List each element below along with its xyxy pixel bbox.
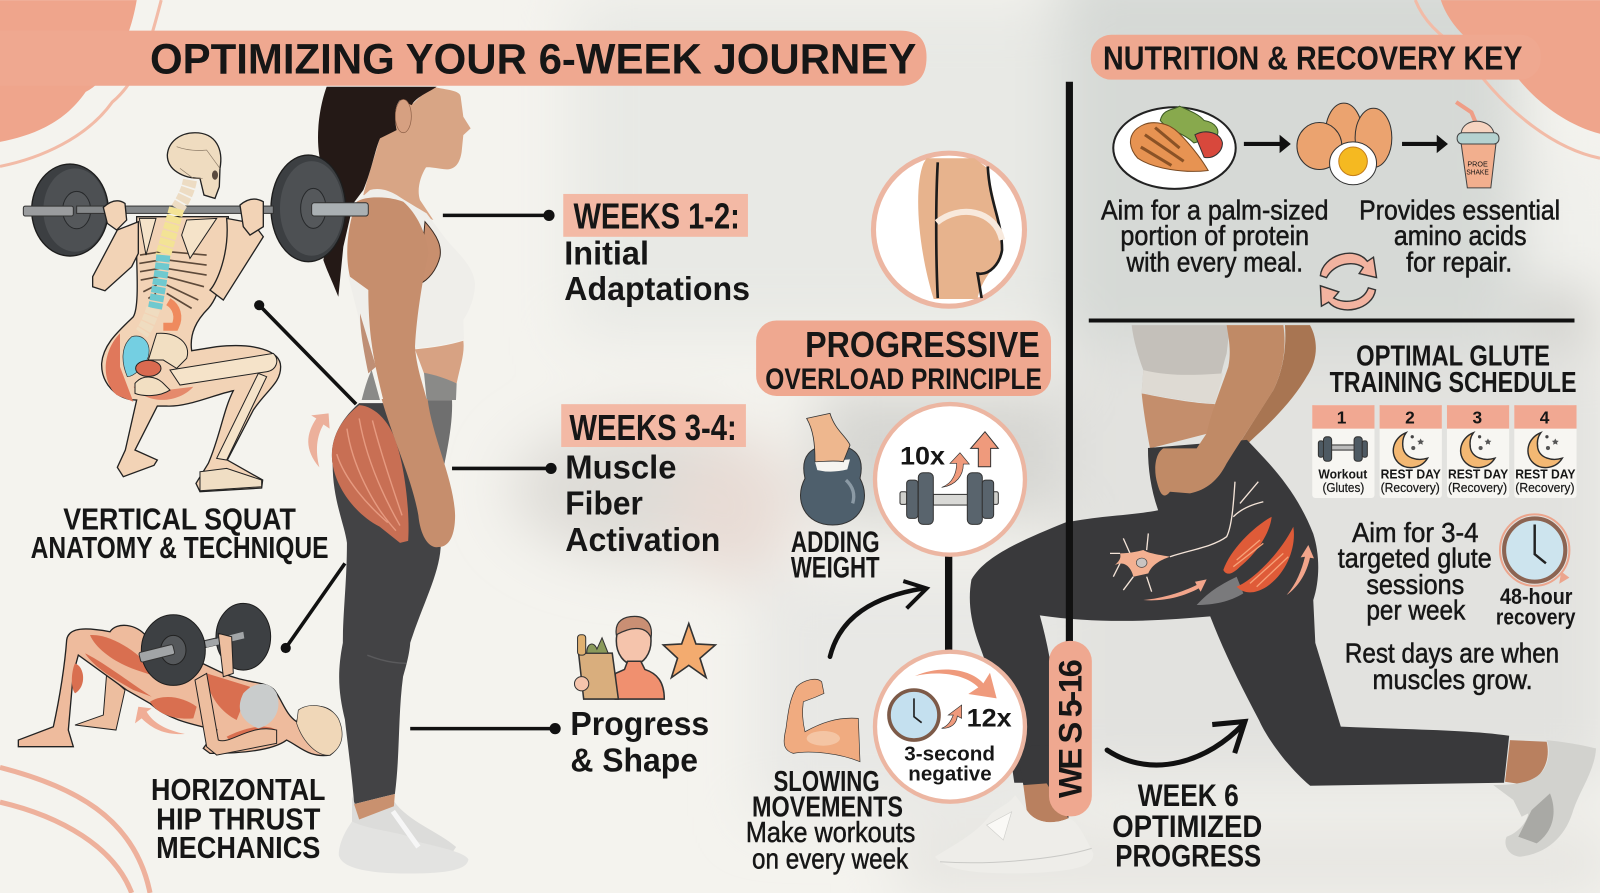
callout: weeks 1-2: WEEKS 1-2: [573,197,740,237]
back skin [360,313,376,373]
icon: recovery cycle arrows [1320,253,1377,310]
neck vertebrae [177,180,190,210]
hip thrust illustration [18,603,342,756]
nutrition heading: NUTRITION & RECOVERY KEY [1103,40,1522,77]
schedule heading [1330,340,1577,399]
label: slowing movements [746,766,915,875]
arrow: upward [971,432,998,467]
callout: progress and shape: Progress [570,706,709,743]
label: adding weight: ADDING [791,526,880,559]
icon: eggs [1297,103,1392,185]
label: vertical squat [31,503,329,565]
decorative corner: bottom left arcs [0,767,150,893]
arms [93,199,263,300]
text: sessions per week: Aim for 3-4 [1352,517,1479,548]
day 1: 1 [1337,408,1347,428]
face and neck [363,87,471,220]
label: 48-hour recovery [1496,584,1576,630]
barbell [139,603,271,685]
underarm skin [419,222,440,284]
colored spine [142,208,177,333]
label: slowing movements: SLOWING [773,766,880,798]
waistband [362,370,457,400]
arrow: protein to eggs [1244,135,1291,153]
text: palm sized protein [1101,194,1329,277]
text: rest days: muscles grow. [1372,664,1533,695]
bare abdomen [1142,393,1215,448]
callout: weeks 1-2: Initial [564,235,649,272]
label: slowing movements: on every week [752,843,909,875]
text: amino acids [1359,194,1560,277]
top garment [240,684,278,728]
decorative corner: top right [1415,0,1600,158]
day 2: REST DAY [1381,467,1441,482]
lower arm and hand [382,399,455,547]
circle: 12x: 12x [967,705,1012,733]
shoulder blades [139,218,217,258]
day 2: 2 [1405,408,1415,428]
glute close-up circle [873,153,1024,306]
icon: chicken plate [1113,106,1236,189]
leader line: hip thrust [281,563,345,653]
ribs [139,252,207,308]
text: amino acids: Provides essential [1359,194,1560,225]
pelvis and femur [135,333,277,460]
circle: 10x [875,404,1025,555]
white bra [348,189,475,349]
curved arrow [135,707,185,734]
label: vertical squat: VERTICAL SQUAT [63,503,296,537]
pill: weeks 5-16 [1049,641,1092,816]
upper body [318,87,475,400]
glute muscle overlay [332,405,409,543]
neuron [1110,482,1263,592]
day 1 [1312,405,1374,498]
callout: weeks 3-4: Fiber [565,485,643,522]
text: amino acids: for repair. [1406,246,1512,277]
label: 48-hour recovery: recovery [1496,605,1576,630]
schedule heading: OPTIMAL GLUTE [1356,340,1550,372]
progressive overload heading: PROGRESSIVE [805,325,1040,365]
text: sessions per week [1338,517,1492,625]
day 3 [1447,405,1509,498]
callout: weeks 3-4: Activation [565,522,720,559]
day 1: (Glutes) [1322,480,1364,495]
label: week 6 [1112,777,1262,873]
arrow: eggs to shake [1402,135,1448,153]
callout: weeks 1-2: Adaptations [564,271,750,308]
day 4: 4 [1540,408,1550,428]
connector [945,553,952,653]
back sneaker [1493,740,1596,857]
text: rest days [1345,637,1559,695]
sacrum [123,336,149,377]
front sneaker [935,743,1093,873]
label: horizontal hip thrust: MECHANICS [156,831,320,865]
callout: weeks 1-2 [443,194,750,308]
grey waistband lower [427,400,452,488]
upper body [1132,325,1316,463]
day 3: REST DAY [1448,467,1508,482]
progressive overload diagram [784,404,1025,802]
text: sessions per week: per week [1366,594,1466,625]
divider horizontal line [1089,318,1574,322]
text: rest days: Rest days are when [1345,637,1559,668]
text: palm sized protein: portion of protein [1120,220,1309,251]
legs and body [18,625,341,756]
label: adding weight [791,526,880,585]
arm [347,197,428,400]
label: horizontal hip thrust [151,773,326,865]
leader line: squat [254,300,356,404]
ponytail and hair [318,87,437,297]
day 2 [1380,405,1442,498]
text: sessions per week: targeted glute [1338,542,1492,573]
front arm and hand [1155,325,1285,495]
feet [200,468,262,491]
arrow: curved [942,453,969,487]
muscle arrows [1143,579,1207,600]
rear arm [1227,325,1316,463]
curved arrow: week 6 [1107,722,1245,765]
label: horizontal hip thrust: HORIZONTAL [151,773,326,807]
back leg [75,673,125,730]
thigh muscles [72,635,277,745]
curved arrow: slowing to adding [830,581,927,657]
title banner: OPTIMIZING YOUR 6-WEEK JOURNEY [150,36,916,84]
circle: 12x [875,652,1025,802]
glute muscle [106,333,133,402]
text: amino acids: amino acids [1394,220,1527,251]
label: week 6: PROGRESS [1115,837,1261,873]
divider vertical line [1066,82,1073,643]
day 4: (Recovery) [1515,480,1574,495]
label: week 6: WEEK 6 [1138,777,1239,813]
icon: protein shake [1456,102,1499,188]
circle: 10x: 10x [900,442,945,470]
woman standing: side view figure [308,87,475,874]
glute muscle with tendons [1197,577,1243,605]
callout: weeks 3-4 [452,404,746,559]
sports bra [1132,325,1230,403]
callout: progress and shape: & Shape [570,743,698,780]
callout: weeks 3-4: WEEKS 3-4: [569,408,737,448]
circle: 12x: 3-second [904,744,995,766]
label: adding weight: WEIGHT [791,552,880,585]
decorative corner: top left [0,0,161,166]
body silhouette [102,217,281,492]
text: sessions per week: sessions [1366,569,1464,600]
label: vertical squat: ANATOMY & TECHNIQUE [31,531,329,565]
progressive overload heading [756,320,1051,396]
text: palm sized protein: Aim for a palm-sized [1101,194,1329,225]
woman lunging figure [935,325,1596,873]
callout: progress and shape [410,616,715,780]
icon: person with grocery bag and star [574,616,715,699]
day 1: Workout [1318,467,1368,482]
training schedule table [1312,405,1577,498]
head [297,706,342,755]
label: week 6: OPTIMIZED [1112,808,1262,844]
day 2: (Recovery) [1381,480,1440,495]
label: horizontal hip thrust: HIP THRUST [156,803,321,837]
progressive overload heading: OVERLOAD PRINCIPLE [765,363,1042,396]
ear [395,99,411,133]
barbell [23,155,368,262]
leggings legs [332,403,444,804]
icon: recovery clock [1500,514,1569,586]
icon: protein shake: SHAKE [1466,169,1489,177]
icon: dumbbell [900,473,998,524]
day 4 [1514,405,1577,498]
squat skeleton anatomy illustration [23,133,368,492]
text: palm sized protein: with every meal. [1126,246,1303,277]
day 3: 3 [1472,408,1482,428]
icon: flexed bicep [784,679,860,762]
front arm, hand and hip details [1110,325,1314,605]
label: slowing movements: MOVEMENTS [752,791,903,823]
day 4: REST DAY [1515,467,1576,482]
icon: protein shake: PROE [1467,160,1488,168]
pill: weeks 5-16: WE S 5-16 [1052,659,1089,798]
label: slowing movements: Make workouts [746,817,915,849]
knee crease [367,655,406,663]
callout: weeks 3-4: Muscle [565,450,677,487]
bare abdomen [415,341,464,383]
label: 48-hour recovery: 48-hour [1500,584,1573,609]
upward arrow beside glute [308,413,330,467]
white sneakers [339,794,468,874]
circle: 12x: negative [908,764,992,786]
arm [195,673,277,755]
day 3: (Recovery) [1448,480,1507,495]
leggings [970,440,1509,786]
icon: kettlebell with hand [800,413,864,525]
skull [167,133,221,198]
icon: clock [889,690,939,740]
